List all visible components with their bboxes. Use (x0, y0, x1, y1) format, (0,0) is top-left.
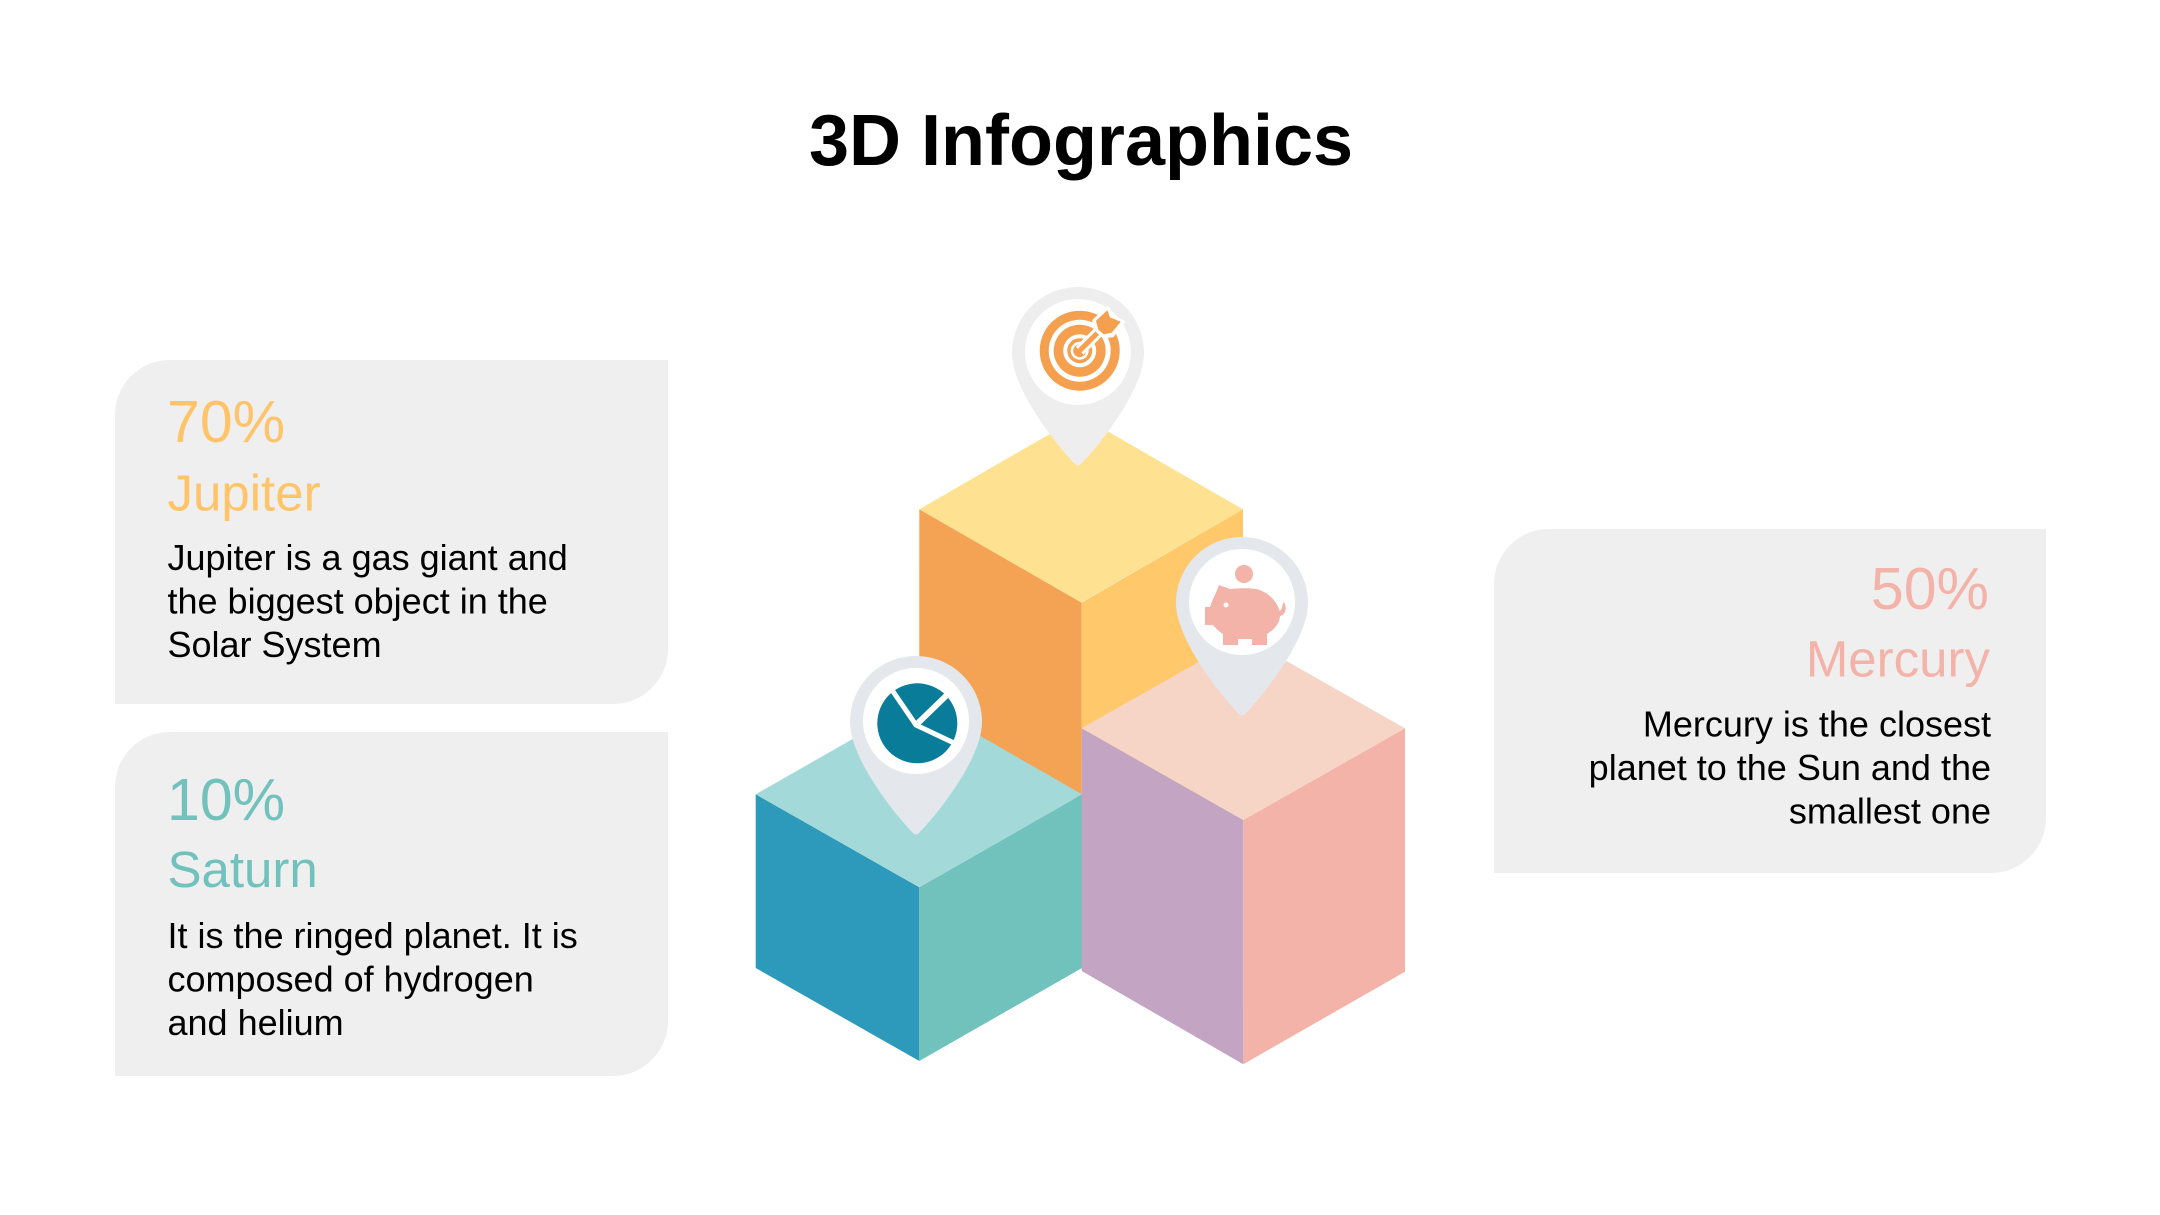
panel: Saturn (115, 732, 668, 1076)
Saturn percentage: 10% (167, 767, 285, 833)
icon: pie chart (877, 683, 957, 763)
Saturn name: Saturn (168, 841, 318, 898)
panel: Jupiter (115, 360, 668, 704)
Mercury percentage: 50% (1871, 556, 1989, 622)
Mercury name: Mercury (1806, 630, 1990, 688)
Mercury description: Mercury is the closest (1643, 704, 1991, 744)
cube: Jupiter yellow (919, 416, 1243, 800)
cube: Saturn teal (756, 701, 1082, 1061)
Jupiter name: Jupiter (168, 464, 321, 522)
Mercury description: smallest one (1789, 790, 1991, 832)
title: 3D Infographics (809, 101, 1353, 181)
Saturn description: and helium (168, 1002, 344, 1043)
pin: target (1012, 287, 1144, 466)
cube: Mercury pink (1082, 636, 1405, 1064)
Saturn description: It is the ringed planet. It is (168, 915, 578, 956)
Jupiter description: Solar System (168, 624, 382, 665)
icon: target with arrow (1040, 308, 1124, 391)
Mercury description: planet to the Sun and the (1589, 747, 1991, 788)
icon: piggy bank with coin (1205, 565, 1286, 645)
Jupiter description: Jupiter is a gas giant and (168, 537, 568, 578)
pin: piggy bank (1176, 537, 1308, 716)
panel: Mercury (1494, 529, 2046, 873)
Saturn description: composed of hydrogen (168, 958, 534, 1000)
pin: pie chart (850, 656, 982, 834)
Jupiter percentage: 70% (167, 389, 285, 455)
Jupiter description: the biggest object in the (168, 580, 548, 622)
